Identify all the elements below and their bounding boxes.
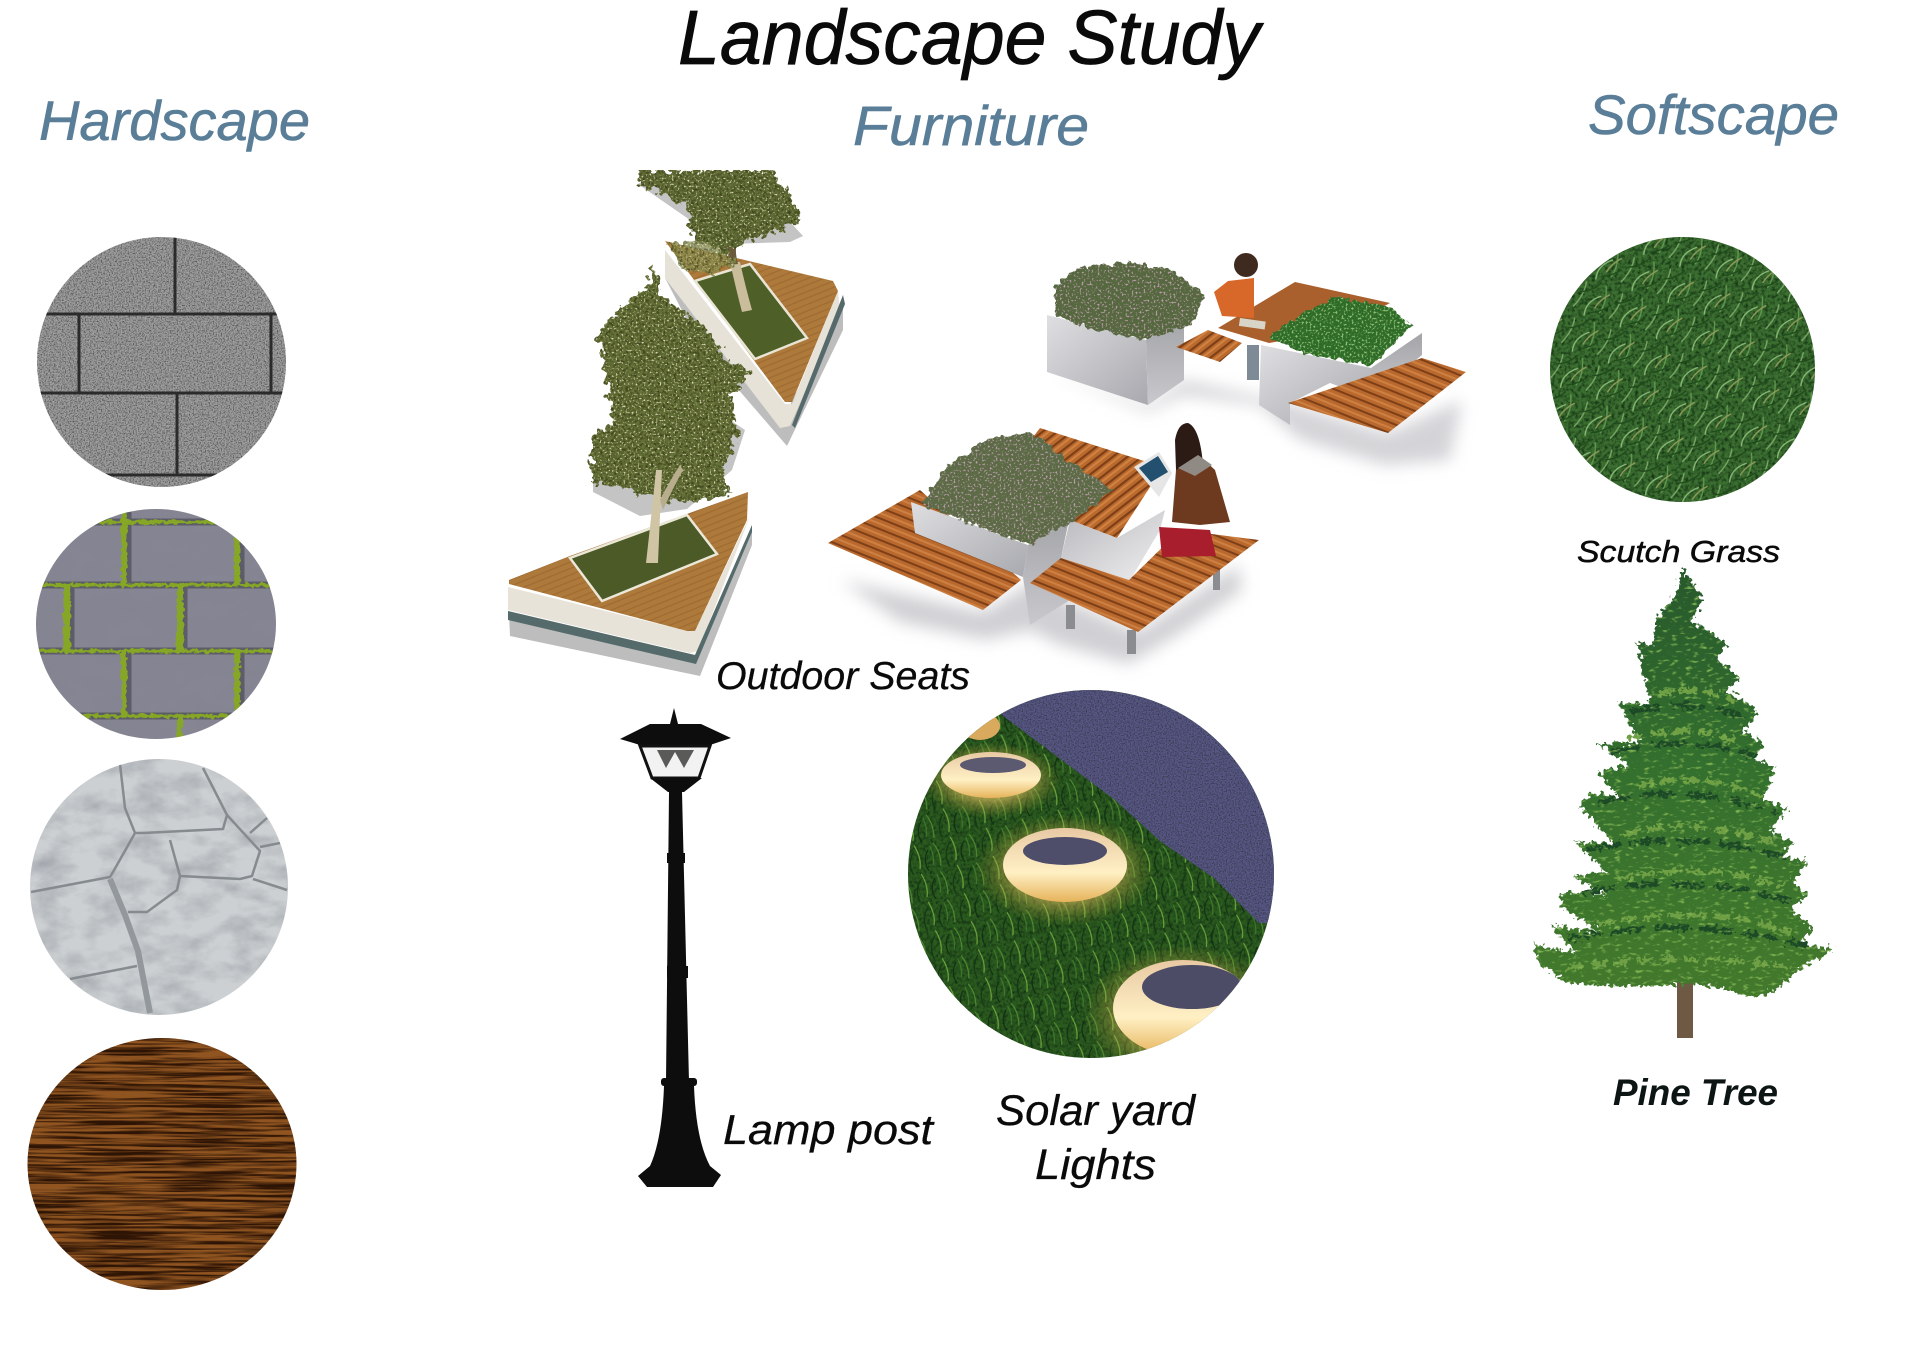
light: far — [968, 717, 1000, 740]
planter: right box — [1259, 333, 1422, 425]
photo: solar yard lights — [908, 690, 1274, 1058]
panel: upper bench and planter group — [1047, 253, 1466, 465]
label: Solar yard Lights: Solar yard — [996, 1087, 1197, 1135]
flowers: lower planter — [922, 432, 1112, 545]
panel: hardscape material swatches — [27, 237, 297, 1292]
light: middle — [975, 814, 1155, 926]
table and seat — [1176, 282, 1390, 380]
grass — [902, 688, 1282, 1063]
shadow: lower birch — [593, 422, 745, 516]
swatch: granite paving — [37, 237, 287, 487]
label: Scutch Grass: Scutch Grass — [1577, 534, 1780, 569]
panel: lower bench and planter group — [828, 423, 1259, 664]
table slats — [1000, 428, 1163, 538]
flowers: left planter — [1055, 262, 1206, 340]
swatch: irregular flagstone — [30, 759, 288, 1015]
icon: lamp post — [620, 708, 731, 1187]
panel: outdoor seats with birch planters — [508, 170, 845, 676]
person: seated woman — [1214, 253, 1266, 330]
planter: upper triangular seat — [665, 241, 845, 446]
tree: upper birch — [638, 170, 803, 312]
swatch: cobble pavers with moss — [36, 509, 276, 739]
planter: white box — [911, 502, 1165, 625]
laptop — [1134, 452, 1172, 497]
bench: front L-shaped slats — [1030, 530, 1259, 654]
trunk — [1677, 975, 1693, 1038]
planter: lower triangular seat — [508, 492, 752, 676]
shadow — [1047, 372, 1462, 465]
heading: Softscape: Softscape — [1588, 83, 1839, 146]
person: woman with laptop — [1172, 423, 1230, 525]
shadow: top birch — [638, 172, 803, 245]
heading: Furniture: Furniture — [853, 94, 1089, 157]
tree: lower birch — [592, 267, 753, 563]
label: Lamp post: Lamp post — [723, 1106, 935, 1153]
light: upper — [928, 744, 1058, 816]
swatch: wood grain — [27, 1036, 297, 1292]
bag: red — [1159, 527, 1216, 557]
pavement — [998, 688, 1282, 923]
swatch: scutch grass — [1550, 236, 1816, 502]
foliage: right planter — [1269, 297, 1412, 366]
planter: left box — [1047, 315, 1184, 405]
illustration: pine tree — [1533, 567, 1835, 1038]
label: Outdoor Seats: Outdoor Seats — [716, 655, 970, 698]
shadow — [841, 565, 1242, 664]
heading: Hardscape: Hardscape — [39, 89, 310, 152]
bench: left slats — [828, 490, 1021, 610]
foliage — [1533, 567, 1835, 998]
label: Pine Tree: Pine Tree — [1613, 1072, 1778, 1113]
light: lower — [1088, 947, 1248, 1057]
label: Solar yard Lights: Lights — [1035, 1141, 1156, 1189]
bench: right slats — [1288, 358, 1466, 433]
label: Solar yard Lights — [996, 1087, 1197, 1189]
